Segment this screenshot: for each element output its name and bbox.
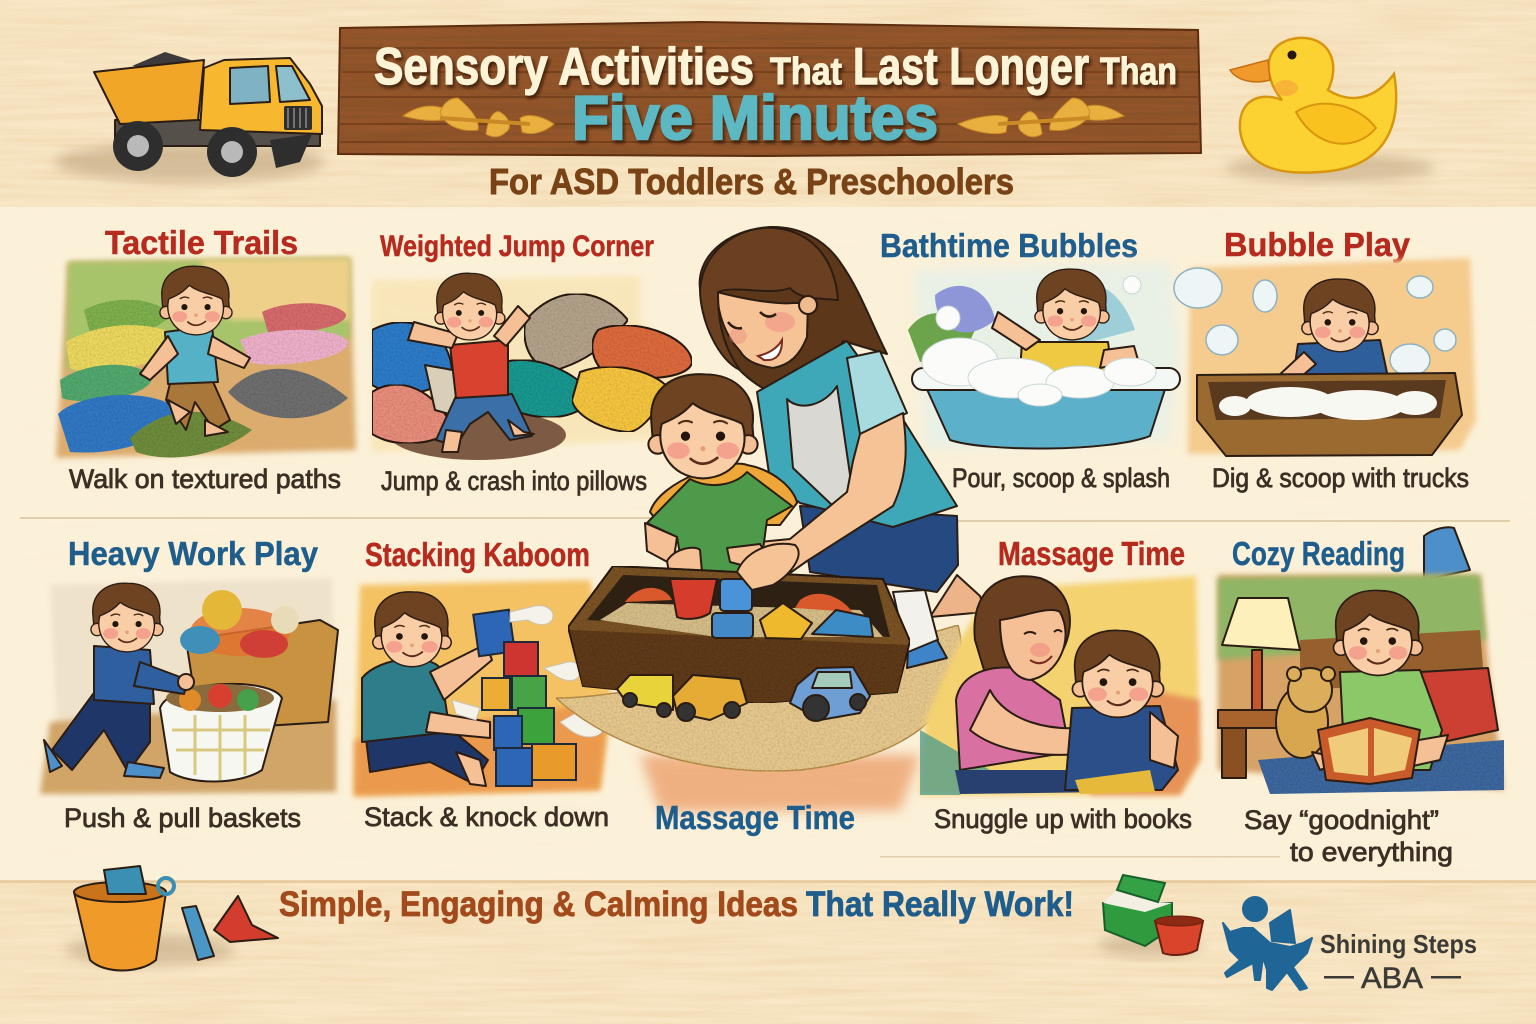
- heading: Weighted Jump Corner: [380, 230, 654, 263]
- heading: Bathtime Bubbles: [880, 227, 1138, 264]
- caption: Walk on textured paths: [69, 464, 341, 494]
- header sign: That: [770, 51, 842, 93]
- caption: Dig & scoop with trucks: [1212, 463, 1469, 493]
- illustration: room and baskets: [40, 578, 338, 794]
- illustration: textured mats: [56, 258, 356, 458]
- panel: Bubble Play: [1174, 226, 1476, 493]
- title line 2: Five Minutes: [572, 84, 938, 153]
- tray: [1197, 373, 1462, 456]
- panel: Cozy Reading: to everything: [1290, 837, 1453, 867]
- panel: Cozy Reading: [1218, 527, 1504, 867]
- illustration: warm background: [354, 580, 612, 796]
- teddy bear: [1276, 667, 1335, 758]
- toy blocks and cup: [670, 579, 873, 639]
- heading: Heavy Work Play: [68, 535, 319, 572]
- heading: Tactile Trails: [105, 224, 298, 261]
- mat: [556, 625, 961, 812]
- caption: Jump & crash into pillows: [381, 466, 647, 496]
- child: [408, 273, 534, 452]
- toy cars: [617, 667, 870, 721]
- mother: [955, 576, 1110, 794]
- panel: Weighted Jump Corner: [372, 230, 692, 496]
- tee: [787, 386, 853, 506]
- caption: Snuggle up with books: [934, 804, 1192, 834]
- child: [1312, 590, 1448, 784]
- mother arm: [737, 413, 906, 585]
- jeans: [800, 506, 958, 592]
- mother: [700, 227, 985, 668]
- header sign: Last Longer: [853, 38, 1089, 96]
- child: [44, 583, 194, 778]
- panel: Tactile Trails: [56, 224, 356, 494]
- caption: Stack & knock down: [364, 802, 609, 832]
- heading: Cozy Reading: [1232, 535, 1405, 572]
- logo: Shining Steps ABA: ABA: [1361, 962, 1423, 995]
- header sign: Than: [1100, 51, 1177, 93]
- sand tray: [568, 566, 910, 703]
- illustration: pillows: [372, 276, 692, 460]
- heading: Bubble Play: [1224, 226, 1411, 263]
- sock and shoe: [893, 590, 938, 654]
- header sign: [336, 20, 1204, 158]
- tagline: That Really Work!: [806, 885, 1074, 924]
- illustration: bedroom: [1218, 575, 1504, 794]
- caption: Pour, scoop & splash: [952, 463, 1170, 493]
- icon: two children: [1223, 897, 1312, 990]
- caption: Push & pull baskets: [64, 803, 301, 833]
- child: [362, 592, 492, 786]
- centre scene: mother, child and sand tray: [556, 227, 985, 812]
- laurel left: [403, 98, 554, 137]
- centre label: Massage Time: [655, 799, 855, 836]
- panel: Stacking Kaboom: [354, 536, 612, 832]
- tagline: Simple, Engaging & Calming Ideas: [279, 885, 798, 924]
- motion puffs: [452, 606, 604, 737]
- panel: Heavy Work Play: [40, 535, 338, 833]
- child: [992, 269, 1138, 372]
- child: [140, 266, 250, 436]
- illustration: sensory tray: [1174, 258, 1476, 454]
- hair fringe: [700, 228, 838, 370]
- mother hand: [737, 544, 799, 590]
- laurel right: [958, 98, 1124, 137]
- icon: rubber duck: [1225, 38, 1435, 182]
- logo text: Shining Steps: [1320, 929, 1477, 959]
- hair back: [700, 227, 887, 392]
- icon: dump truck: [55, 52, 325, 182]
- face: [717, 292, 808, 368]
- icon: beach bucket and spade: [65, 866, 278, 970]
- child: [1276, 279, 1392, 398]
- child: [1065, 630, 1178, 794]
- title line 1: Sensory Activities: [374, 38, 754, 96]
- subtitle: For ASD Toddlers & Preschoolers: [489, 161, 1014, 202]
- foam: [922, 276, 1156, 406]
- child: [645, 374, 797, 582]
- heading: Massage Time: [998, 535, 1185, 572]
- cardigan: [757, 341, 957, 527]
- caption: Say “goodnight”: [1244, 805, 1439, 835]
- panel: Bathtime Bubbles: [880, 227, 1180, 493]
- illustration: bathtub: [908, 262, 1180, 450]
- wooden plank: [336, 20, 1204, 158]
- icon: green box and red cup: [1098, 875, 1203, 957]
- illustration: warm background: [920, 576, 1200, 795]
- block tower: [473, 610, 576, 786]
- panel: Massage Time: [920, 535, 1200, 834]
- heading: Stacking Kaboom: [365, 536, 590, 573]
- icon: blue floor lamp: [1424, 527, 1470, 622]
- logo: Shining Steps ABA: [1223, 897, 1477, 995]
